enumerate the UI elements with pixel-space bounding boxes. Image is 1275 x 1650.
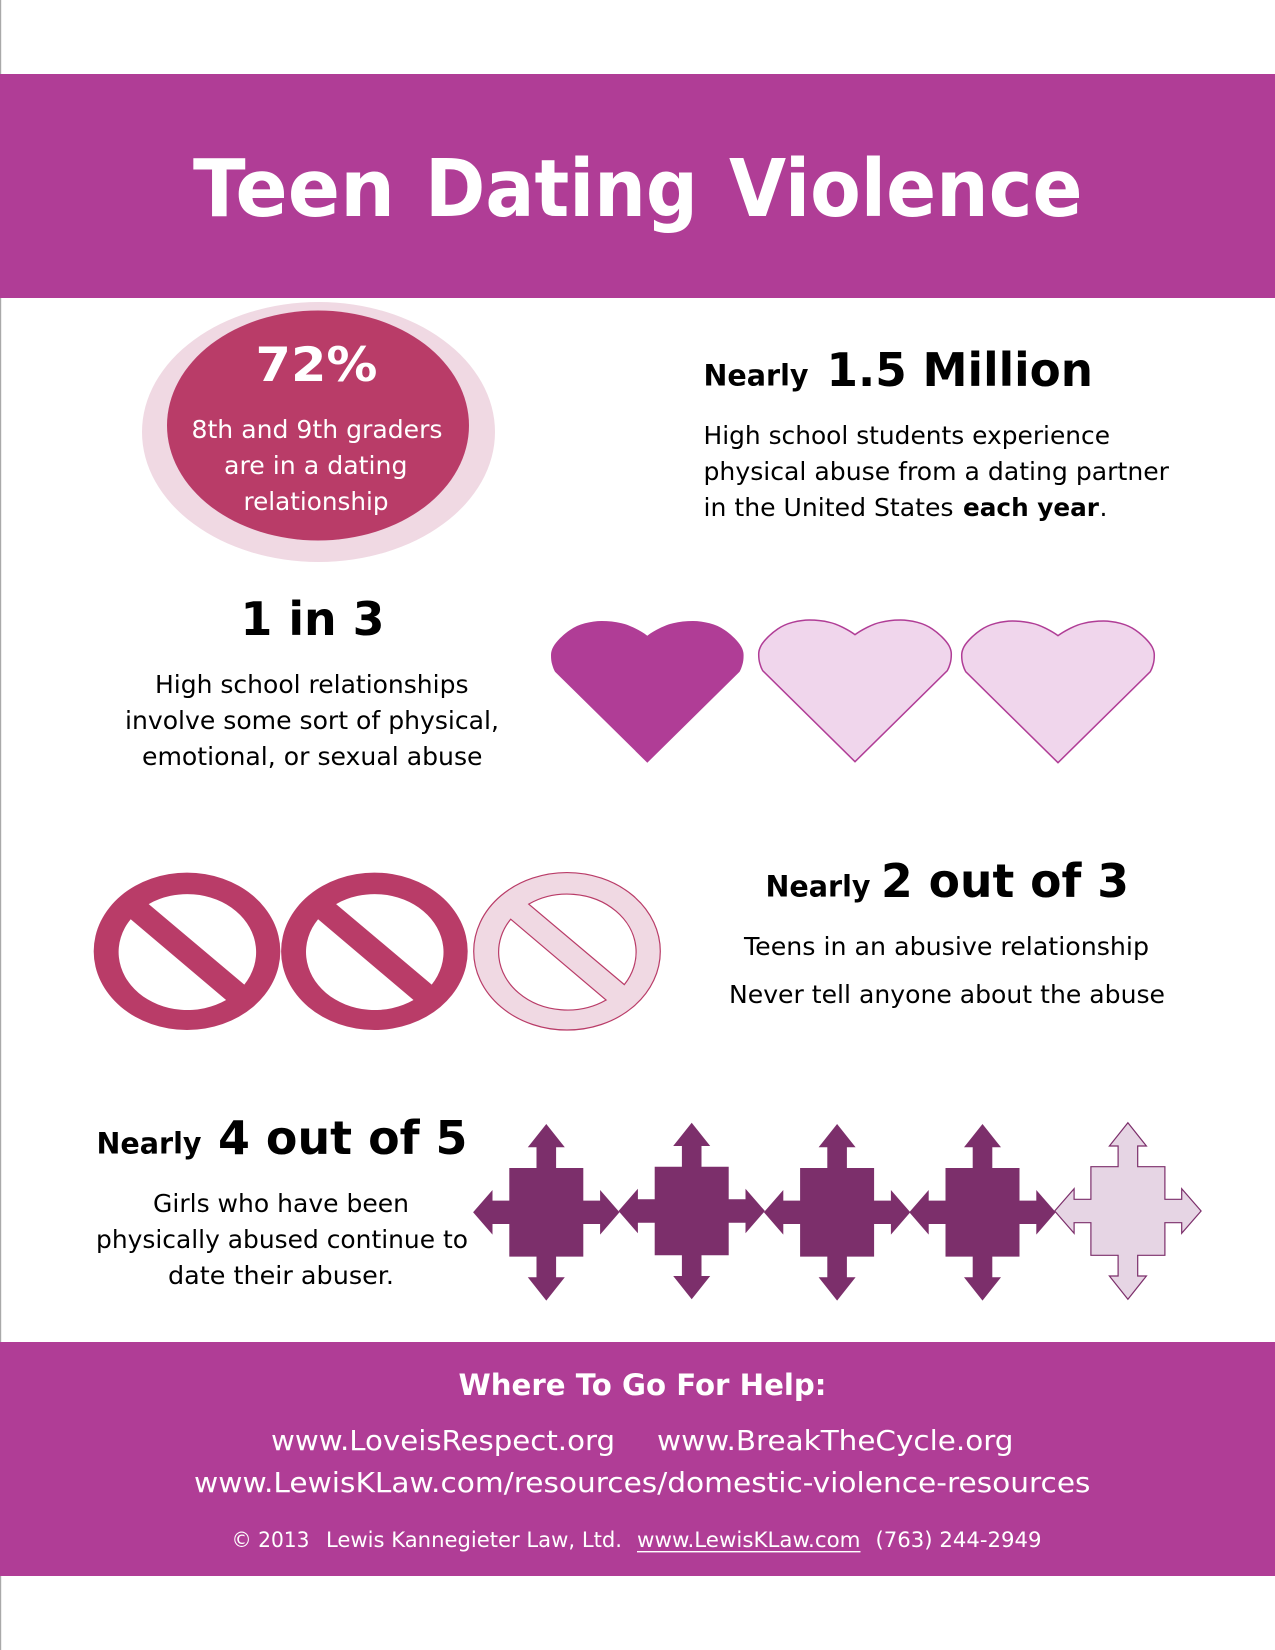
body text: High school students experience (704, 421, 1110, 450)
body text: Teens in an abusive relationship (743, 932, 1149, 961)
stat: 72%: 72% (256, 338, 378, 393)
body text (704, 421, 1170, 522)
help links: www.LewisKLaw.com/resources/domestic-violence-resources (194, 1466, 1090, 1499)
oval text (192, 415, 442, 516)
copyright line: www.LewisKLaw.com (637, 1528, 860, 1552)
icon: filled arrow cross (618, 1123, 765, 1299)
panel: 72% oval (142, 302, 495, 562)
heading (704, 343, 1093, 397)
body text: physically abused continue to (96, 1225, 468, 1254)
title banner (0, 74, 1275, 298)
hearts chart: 1 of 3 (551, 620, 1154, 763)
icon: filled arrow cross (473, 1124, 620, 1301)
body text: involve some sort of physical, (125, 706, 499, 735)
heading: 1.5 Million (826, 343, 1093, 397)
body text: Girls who have been (153, 1189, 409, 1218)
heading (96, 1111, 468, 1165)
footer banner (0, 1342, 1275, 1576)
icon: light no sign (474, 873, 660, 1030)
footer heading: Where To Go For Help: (458, 1368, 826, 1402)
icon: filled arrow cross (764, 1124, 910, 1301)
heading: 4 out of 5 (218, 1111, 468, 1165)
body text: each year (963, 493, 1100, 522)
body text: . (1100, 493, 1107, 522)
title: Teen (193, 143, 395, 235)
icon: light heart (962, 621, 1154, 763)
oval text: relationship (244, 487, 388, 516)
panel: 1 in 3 (125, 592, 499, 771)
body text: date their abuser. (168, 1261, 394, 1290)
title: Violence (729, 143, 1082, 235)
icon: filled arrow cross (909, 1124, 1056, 1301)
icon: filled heart (551, 621, 744, 763)
body text (729, 932, 1165, 1009)
heading: 2 out of 3 (881, 854, 1129, 908)
copyright line (232, 1528, 1042, 1552)
oval text: are in a dating (224, 451, 408, 480)
arrows chart: 4 of 5 (473, 1123, 1201, 1301)
copyright line: (763) 244-2949 (876, 1528, 1042, 1552)
icon: filled no sign (281, 873, 468, 1030)
title (193, 143, 1082, 235)
help links: www.LoveisRespect.org (271, 1424, 615, 1457)
panel: 1.5 million (704, 343, 1170, 522)
heading: Nearly (96, 1126, 202, 1160)
copyright line: Lewis Kannegieter Law, Ltd. (326, 1528, 622, 1552)
heading: Nearly (766, 870, 871, 904)
body text: emotional, or sexual abuse (142, 742, 482, 771)
help links (194, 1424, 1090, 1499)
heading (766, 854, 1129, 908)
heading: Nearly (704, 358, 809, 392)
body text: High school relationships (155, 670, 468, 699)
heading: 1 in 3 (240, 592, 384, 646)
no-signs chart: 2 of 3 (94, 873, 660, 1030)
help links: www.BreakTheCycle.org (657, 1424, 1014, 1457)
panel: 4 out of 5 (96, 1111, 468, 1290)
title: Dating (425, 143, 698, 235)
body text: physical abuse from a dating partner (704, 457, 1170, 486)
body text (96, 1189, 468, 1290)
icon: light heart (759, 620, 951, 762)
oval text: 8th and 9th graders (192, 415, 442, 444)
icon: filled no sign (94, 873, 280, 1030)
body text: in the United States (704, 493, 954, 522)
icon: light arrow cross (1055, 1123, 1201, 1299)
panel: 2 out of 3 (729, 854, 1165, 1009)
body text (125, 670, 499, 771)
body text: Never tell anyone about the abuse (729, 980, 1165, 1009)
copyright line: © 2013 (232, 1528, 310, 1552)
